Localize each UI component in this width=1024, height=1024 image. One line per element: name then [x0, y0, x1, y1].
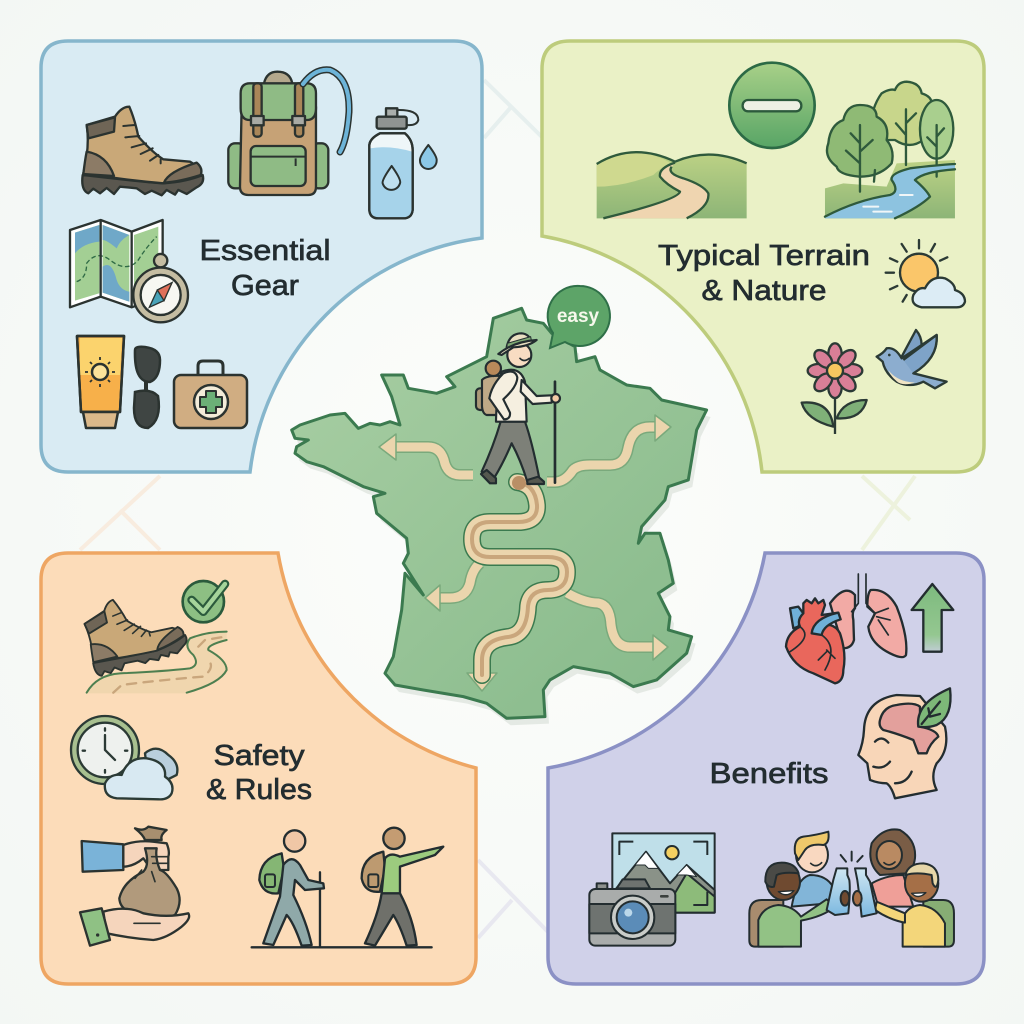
- icon: sunglasses: [134, 347, 160, 428]
- icon: clock with cloud: [71, 716, 177, 799]
- trail arrowheads: [379, 415, 671, 691]
- speech bubble: easy: [548, 286, 610, 348]
- icon: hydration tube: [303, 70, 349, 152]
- icon: heart: [786, 598, 844, 683]
- icon: flower: [802, 343, 867, 434]
- hiker figure: [476, 333, 560, 484]
- icon: trail under boot: [87, 632, 227, 693]
- trail branches: [393, 427, 657, 647]
- icon: lungs: [830, 574, 906, 657]
- icon: backpack: [228, 72, 328, 195]
- heading: Typical Terrain & Nature: & Nature: [702, 275, 826, 307]
- speech bubble: easy: easy: [557, 306, 600, 327]
- panel background: orange: [41, 553, 476, 984]
- icon: map: [70, 220, 163, 307]
- icon: boot on trail: [77, 583, 190, 679]
- panel background: purple: [548, 553, 984, 984]
- icon: group of hikers toasting: [749, 829, 954, 947]
- heading: Benefits: Benefits: [710, 758, 828, 790]
- icon: check mark badge: [183, 581, 225, 622]
- icon: boot: [82, 107, 203, 195]
- heading: Essential Gear: Essential: [200, 235, 330, 267]
- icon: hills with path: [597, 152, 747, 218]
- icon: sunscreen: [77, 336, 124, 428]
- panel background: green: [542, 41, 984, 472]
- heading: Safety & Rules: Safety: [214, 740, 305, 772]
- map outline: [292, 308, 707, 718]
- heading: Essential Gear: Gear: [231, 270, 299, 302]
- icon: head with leaf: [858, 688, 951, 798]
- icon: upward arrow: [912, 584, 953, 652]
- heading: Typical Terrain & Nature: Typical Terrain: [658, 240, 870, 272]
- main winding trail: [472, 476, 567, 675]
- icon: bird: [877, 330, 947, 388]
- icon: compass: [133, 254, 188, 322]
- map shadow: [296, 315, 711, 725]
- map of France with trails: [292, 286, 711, 725]
- panel: benefits: [548, 553, 984, 984]
- icon: minus sign badge: [729, 63, 815, 148]
- icon: sun and cloud: [886, 240, 965, 307]
- icon: two hikers: [252, 828, 443, 947]
- heading: Safety & Rules: & Rules: [206, 774, 312, 806]
- panel: safety and rules: [41, 553, 476, 984]
- panel: essential gear: [41, 41, 482, 472]
- panel: typical terrain and nature: [542, 41, 984, 472]
- icon: hands with trash bag: [80, 827, 189, 946]
- icon: forest with river: [825, 82, 955, 218]
- icon: first aid kit: [174, 361, 247, 428]
- icon: water bottle: [369, 108, 437, 218]
- icon: camera and photo: [589, 833, 715, 946]
- panel background: blue: [41, 41, 482, 472]
